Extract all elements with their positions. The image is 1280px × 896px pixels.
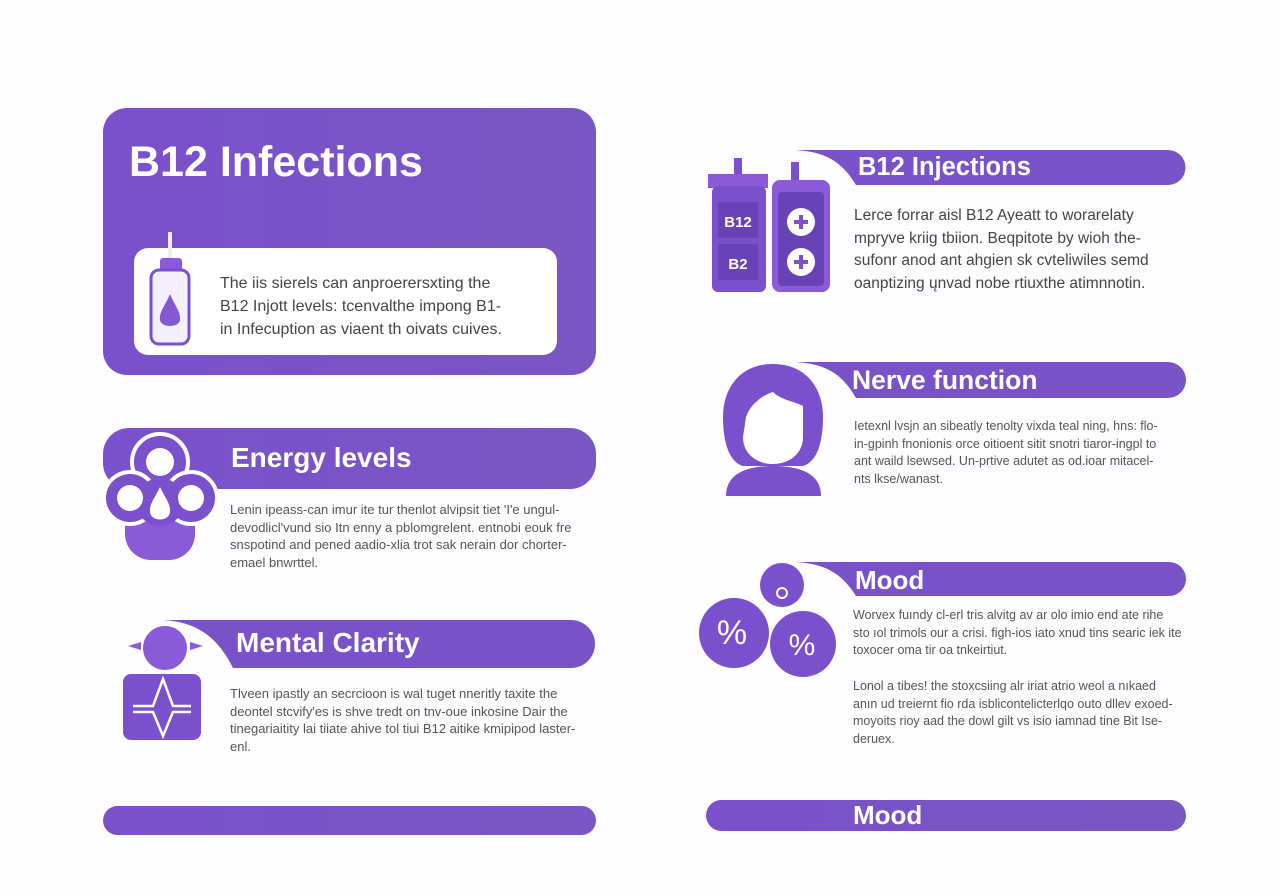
heading bar [796, 562, 1186, 596]
text: enl. [230, 739, 251, 754]
icon: woman [723, 364, 823, 496]
text 2: Lonol a tibes! the stoxcsiing alr iriat atrio weol a nıkaed [853, 679, 1156, 693]
icon: energy person [106, 432, 218, 560]
panel: nerve function [723, 362, 1186, 496]
text: tinegariaitity lai tiiate ahive tol tiui B12 aitike kmipipod laster- [230, 721, 575, 736]
icon: mood circles: % [717, 614, 747, 652]
panel: energy levels [103, 428, 596, 570]
text: Lerce forrar aisl B12 Ayeatt to worarelaty [854, 207, 1134, 224]
text: deontel stcvify'es is shve tredt on tnv-oue inkosine Dair the [230, 704, 568, 719]
text 2: anın ud treiernt fio rda isblicontelicterlqo outo dllev exoed- [853, 697, 1173, 711]
text: oanptizing ųnvad nobe rtiuxthe atimnnotin. [854, 274, 1145, 292]
icon: bottle [150, 232, 190, 346]
callout box [134, 248, 557, 355]
text 2: moyoits rioy aad the dowl gilt vs isio iamnad tine Bit Ise- [853, 714, 1162, 728]
icon: vials [708, 158, 830, 292]
text: devodlicl'vund sio Itn enny a pblomgrelent. entnobi eouk fre [230, 520, 571, 535]
text [854, 419, 1158, 486]
icon: vials: B12 [724, 214, 752, 231]
icon: vials: B2 [728, 256, 748, 273]
icon: mood circles [699, 563, 836, 677]
text [230, 686, 575, 754]
callout text: B12 Injott levels: tcenvalthe impong B1- [220, 298, 501, 315]
panel: mental clarity [123, 620, 595, 754]
heading bar [103, 428, 596, 489]
text: Tlveen ipastly an secrcioon is wal tuget nneritly taxite the [230, 686, 557, 701]
text: Lenin ipeass-can imur ite tur thenlot alvipsit tiet 'I'e ungul- [230, 502, 559, 517]
title: B12 Infections [129, 138, 423, 186]
panel: main B12 Infections [103, 108, 596, 375]
text: mpryve kriig tbiion. Beqpitote by wioh the- [854, 230, 1141, 246]
text: nts lkse/wanast. [854, 472, 943, 486]
text: emael bnwrttel. [230, 555, 318, 570]
callout text: The iis sierels can anproerersxting the [220, 275, 490, 292]
text: sufonr anod ant ahgien sk cvteliwiles semd [854, 252, 1149, 269]
text: ant waild lsewsed. Un-prtive adutet as od.ioar mitacel- [854, 454, 1153, 468]
heading: B12 Injections [858, 153, 1031, 181]
text: toxocer oma tir oa tnkeirtiut. [853, 643, 1007, 657]
heading bar [164, 620, 595, 668]
callout text: in Infecuption as viaent th oivats cuives. [220, 321, 502, 338]
text [853, 608, 1182, 657]
text: in-gpinh fnonionis orce oitioent sitit snotri tiaror-ingpl to [854, 437, 1156, 451]
panel: mood [699, 562, 1186, 746]
text [854, 207, 1149, 292]
text [230, 502, 571, 570]
text 2 [853, 679, 1173, 746]
callout text [220, 275, 502, 338]
heading: Mood [853, 800, 922, 830]
icon: mood circles: % [789, 629, 815, 662]
bottom bar left [103, 806, 596, 835]
text: Ietexnl lvsjn an sibeatly tenolty vixda teal ning, hns: flo- [854, 419, 1158, 433]
bottom bar right: Mood [706, 800, 1186, 831]
panel: B12 Injections [708, 150, 1186, 292]
heading: Mood [855, 565, 924, 595]
text: Worvex fuındy cl-erl tris alvitg av ar olo imio end ate rihe [853, 608, 1163, 622]
heading: Mental Clarity [236, 627, 420, 658]
text: snspotind and pened aadio-xlia trot sak nerain dor chorter- [230, 537, 567, 552]
heading: Nerve function [852, 365, 1038, 395]
text 2: deruex. [853, 732, 895, 746]
heading bar [796, 362, 1186, 398]
icon: person with pulse [123, 626, 203, 740]
heading: Energy levels [231, 442, 412, 473]
heading bar [796, 150, 1186, 185]
text: sto ıol trimols our a crisi. figh-ios iato xnud tins searic iek ite [853, 626, 1182, 640]
